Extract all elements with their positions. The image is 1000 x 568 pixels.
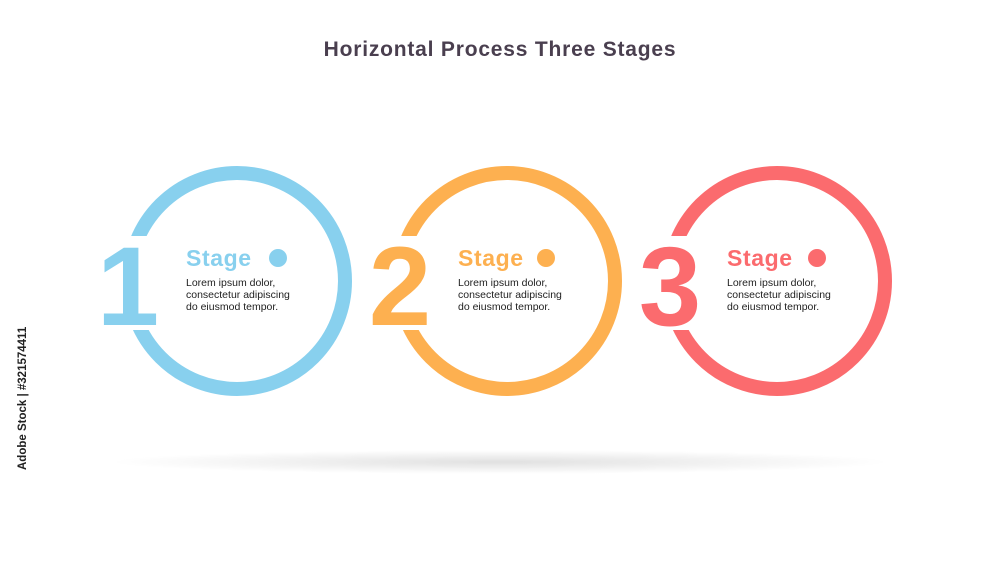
stage 2 text: Lorem ipsum dolor, <box>458 277 547 289</box>
stage 2 text: consectetur adipiscing <box>458 289 562 301</box>
stage 3 heading: Stage <box>727 245 793 271</box>
stage 1 heading: Stage <box>186 245 252 271</box>
stage 2 text: do eiusmod tempor. <box>458 301 550 313</box>
stage 1 text: do eiusmod tempor. <box>186 301 278 313</box>
stage 3 text: Lorem ipsum dolor, <box>727 277 816 289</box>
stage 3 text: do eiusmod tempor. <box>727 301 819 313</box>
shadow <box>110 450 890 474</box>
stage 1 text: consectetur adipiscing <box>186 289 290 301</box>
stage 2 heading: Stage <box>458 245 524 271</box>
stage 3 <box>634 173 885 389</box>
stage 3 text: consectetur adipiscing <box>727 289 831 301</box>
side caption: Adobe Stock | #321574411 <box>17 326 29 470</box>
number 3: 3 <box>639 224 701 349</box>
number 1: 1 <box>97 224 159 349</box>
stage 2 <box>364 173 615 389</box>
title: Horizontal Process Three Stages <box>324 38 676 61</box>
stage 1 <box>97 173 345 389</box>
stage 1 text: Lorem ipsum dolor, <box>186 277 275 289</box>
number 2: 2 <box>369 224 431 349</box>
